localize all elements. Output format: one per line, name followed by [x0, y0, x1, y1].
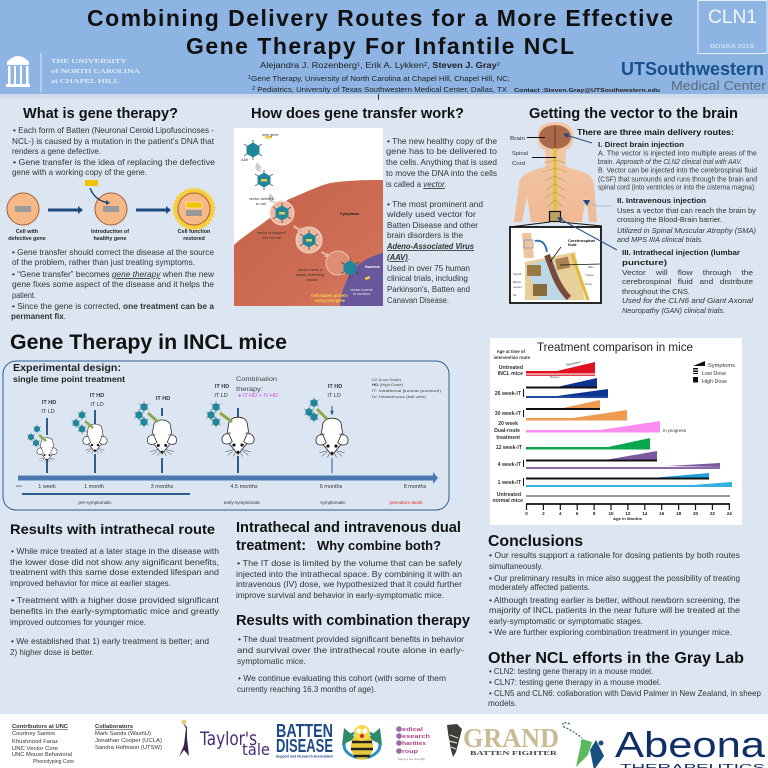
20 week dual route bar: In progress: [663, 428, 686, 433]
figure: vector entering the cell: Nucleus: [365, 265, 380, 269]
figure: vector entering the cell: vector inserts: [350, 288, 373, 292]
cell with defective gene: defective gene: [8, 236, 46, 242]
text: vector explanation: Used in over 75 human: [387, 263, 470, 273]
cell with restored function: [174, 189, 214, 242]
dose labels: IT HD: [156, 396, 170, 402]
timeline labels: birth: [16, 484, 22, 488]
route II: intravenous injection: [617, 196, 757, 244]
row labels: 12 week-IT: [496, 445, 523, 451]
figure: vector entering the cell: using new gene: [315, 298, 346, 303]
text: vector explanation: (AAV).: [387, 252, 410, 262]
text: gene therapy intro: • Gene transfer is the idea of replacing the defective: [13, 157, 215, 167]
figure: vector entering the cell: vector delivers: [249, 197, 274, 201]
row labels: 1 week-IT: [498, 480, 522, 486]
mouse and injection 6 months: [304, 398, 348, 458]
authors and affiliations: Gene Therapy, University of North Carolina at Chapel Hill, Chapel Hill, NC;: [251, 76, 510, 83]
section: results with intrathecal route: 2) higher dose is better.: [10, 647, 94, 657]
authors and affiliations: 2: [252, 86, 255, 92]
combination therapy label: Combination: [236, 376, 277, 383]
text: gene transfer explanation: patient.: [12, 290, 36, 300]
dose labels: IT HD: [90, 393, 104, 399]
row labels: 20 week: [498, 421, 518, 427]
dose labels: IT LD: [41, 409, 55, 415]
cell with restored function: restored: [183, 236, 205, 242]
combination therapy label: therapy:: [236, 386, 263, 393]
30 week bars: [526, 400, 627, 420]
timeline labels: 8 months: [404, 484, 427, 490]
figure: vector entering the cell: new gene: [262, 133, 278, 137]
figure: vector entering the cell: in nucleus: [353, 292, 370, 296]
experimental design heading: Experimental design:: [13, 363, 121, 374]
x axis: Age in Months: [613, 517, 642, 521]
inset: lumbar puncture anatomy: Skin: [588, 265, 594, 269]
section: other NCL efforts: models.: [488, 698, 517, 708]
untreated INCL bars: Rescue: [550, 375, 560, 379]
label: Spinal Cord: Cord: [512, 161, 525, 167]
section: results with combination therapy: Results with combination therapy: [236, 612, 471, 629]
timeline arrow: [18, 472, 438, 484]
authors and affiliations: [248, 61, 661, 94]
inset: lumbar puncture anatomy: Blood: [513, 280, 521, 284]
figure: vector entering the cell: into cell via: [262, 236, 282, 240]
logo: Batten Disease: BATTEN: [276, 721, 333, 741]
figure: human body with spinal cord: [510, 122, 602, 227]
dose legend: [372, 377, 442, 399]
text: vector explanation: clinical trials, including: [387, 273, 468, 283]
timeline labels: [16, 484, 427, 490]
text: vector explanation: [386, 136, 497, 305]
logo: Taylor's Tale: tale: [242, 740, 270, 759]
x axis: 24: [727, 511, 732, 516]
authors and affiliations: 1: [357, 62, 360, 68]
row labels: 30 week-IT: [495, 411, 522, 417]
collaborators: Jonathan Cooper (UCLA): [95, 738, 162, 744]
route I: direct brain injection: [598, 140, 757, 192]
section: conclusions: • We are further exploring combination treatment in younger mice.: [489, 627, 732, 637]
route III: intrathecal injection: III. Intrathecal injection (lumbar: [622, 248, 740, 257]
contributors: Contributors at UNC: [12, 724, 68, 730]
route II: intravenous injection: II. Intravenous injection: [617, 196, 706, 205]
logo: Batten Disease: [276, 721, 333, 758]
figure: vector entering the cell: vesicle: [306, 278, 318, 282]
disease stage labels: premature death: [389, 500, 423, 505]
authors and affiliations: 1: [248, 75, 251, 81]
text: gene transfer explanation: of the problem, rather than just treating symptoms.: [12, 257, 195, 267]
heading: Getting the vector to the brain: Getting the vector to the brain: [529, 106, 738, 122]
text: vector explanation: Parkinson's, Batten and: [387, 284, 470, 294]
section: why combine both: Why combine both?: [317, 538, 441, 553]
cell with healthy gene introduced: healthy gene: [94, 236, 126, 242]
logo: Medical Research Charities Group: esearch: [402, 734, 430, 740]
logo: Medical Research Charities Group: being a our strength: [398, 757, 425, 761]
route I: direct brain injection: (CSF) that surrounds and runs through the brain and: [598, 176, 757, 184]
collaborators: Mark Sands (WashU): [95, 731, 151, 737]
section: results with intrathecal route: [10, 521, 220, 657]
x axis: 10: [608, 511, 614, 516]
timeline labels: 4.5 months: [230, 484, 258, 490]
authors and affiliations: Steven J. Gray: [432, 61, 497, 70]
section: conclusions: Conclusions: [488, 533, 583, 550]
text: vector explanation: to move the DNA into the cells: [386, 168, 497, 178]
timepoint markers: [47, 406, 334, 473]
arrow: [136, 206, 171, 214]
text: vector explanation: Batten Disease and other: [387, 220, 478, 230]
logo: UT Southwestern Medical Center: Medical Center: [671, 79, 766, 93]
text: gene transfer explanation: • Gene transfer should correct the disease at the source: [12, 247, 214, 257]
disease stage labels: early-symptomatic: [224, 500, 261, 505]
contributors: Phenotyping Core: [33, 759, 74, 765]
section: results with combination therapy: [236, 612, 471, 694]
section: why combine both: treatment:: [236, 538, 306, 554]
x axis: 2: [542, 511, 545, 516]
section: other NCL efforts: • CLN7: testing gene therapy in a mouse model.: [489, 677, 661, 687]
contributors: Courtney Santos: [12, 731, 55, 737]
text: gene therapy intro: NCL-) is caused by a mutation in the patient's DNA that: [12, 136, 215, 146]
section: results with combination therapy: symptomatic mice.: [237, 656, 306, 666]
text: gene therapy intro: • Each form of Batten (Neuronal Ceroid Lipofuscinoses -: [13, 125, 214, 135]
combination therapy label: ● IT HD + IV HD: [238, 393, 278, 399]
untreated INCL bars: [526, 360, 595, 379]
logo: Medical Research Charities Group: harities: [402, 741, 426, 747]
20 week dual route bar: [526, 421, 686, 433]
text: delivery routes: There are three main delivery routes:: [577, 127, 734, 137]
row labels: INCL mice: [498, 371, 523, 377]
row labels: 26 week-IT: [495, 391, 522, 397]
section: other NCL efforts: Other NCL efforts in the Gray Lab: [488, 650, 744, 667]
logo: University of North Carolina: at CHAPEL HILL: [51, 78, 119, 85]
logo: Batten Disease: DISEASE: [276, 736, 333, 756]
section: conclusions: simultaneously.: [489, 561, 543, 571]
heading: Gene Therapy in INCL mice: Gene Therapy in INCL mice: [10, 331, 287, 354]
text: gene transfer explanation: [11, 247, 215, 321]
mouse and injection 4.5 months: [206, 402, 254, 457]
dose labels: IT HD: [42, 400, 56, 406]
row labels: Dual-route: [494, 428, 520, 434]
cell with healthy gene introduced: [85, 180, 129, 242]
route III: intrathecal injection: Neuropathy (GAN) clinical trials.: [622, 306, 725, 315]
cell with defective gene: Cell with: [16, 229, 38, 235]
heading: What is gene therapy: What is gene therapy?: [23, 106, 178, 122]
x axis: 18: [676, 511, 682, 516]
logo: bee mascot: [342, 725, 382, 760]
figure: vector entering the cell: AAV: [241, 158, 249, 162]
label: Spinal Cord: Spinal: [512, 151, 528, 157]
route III: intrathecal injection: Vector will flow through the: [622, 268, 753, 277]
cell with healthy gene introduced: Introduction of: [91, 229, 129, 235]
text: vector explanation: gene has to be delivered to: [386, 146, 497, 156]
section: conclusions: moderately affected patients.: [489, 582, 590, 592]
route I: direct brain injection: B. Vector can be injected into the cerebrospinal fluid: [598, 168, 757, 174]
timeline labels: 3 months: [151, 484, 174, 490]
logo: Batten Disease: Support and Research Association: [276, 754, 333, 758]
authors and affiliations: Alejandra J. Rozenberg: [260, 61, 344, 70]
logo: University of North Carolina: [6, 53, 140, 92]
text: gene transfer explanation: • Since the gene is corrected, one treatment can be a: [12, 301, 214, 311]
inset: lumbar puncture anatomy: Cerebrospinal: [568, 238, 595, 243]
dose legend: IT: Intrathecal (lumbar puncture): [372, 388, 442, 393]
row labels: Untreated: [499, 365, 523, 371]
x axis: 6: [576, 511, 579, 516]
label: Spinal Cord: [512, 151, 556, 167]
section: other NCL efforts: • CLN2: testing gene therapy in a mouse model.: [489, 666, 653, 676]
route I: direct brain injection: A. The vector is injected into multiple areas of the: [598, 150, 757, 158]
row labels: intervention route: [493, 355, 531, 360]
logo: Medical Research Charities Group: roup: [402, 749, 419, 755]
text: gene therapy intro: gene with a working copy of the gene.: [12, 167, 147, 177]
collaborators: Sandra Hofmann (UTSW): [95, 745, 162, 751]
logo: University of North Carolina: THE UNIVERSITY: [51, 58, 127, 65]
dose labels: IT LD: [90, 402, 104, 408]
section: conclusions: [488, 533, 740, 637]
mouse and injection 1 month: [72, 410, 107, 454]
section: results with intrathecal route: benefits in the early-symptomatic mice and greatly: [10, 606, 220, 616]
title: Gene Therapy For Infantile NCL: [186, 33, 574, 59]
section: results with intrathecal route: • Treatment with a higher dose provided significant: [11, 595, 220, 605]
cell with restored function: Cell function: [178, 229, 210, 235]
section: conclusions: early-symptomatic or symptomatic stages.: [489, 616, 643, 626]
header banner: [0, 0, 768, 100]
authors and affiliations: ,: [427, 61, 432, 70]
section: other NCL efforts: [488, 650, 761, 708]
section: results with intrathecal route: treatment with this same dose extended lifespan and: [10, 567, 219, 577]
logo: UT Southwestern Medical Center: [621, 59, 766, 93]
collaborators: [95, 724, 162, 751]
text: vector explanation: Canavan Disease.: [387, 295, 449, 305]
logo: Abeona Therapeutics: [563, 723, 766, 768]
heading: How does gene transfer work: How does gene transfer work?: [251, 106, 464, 122]
route II: intravenous injection: Uses a vector that can reach the brain by: [617, 206, 756, 215]
diagram: gene replacement in cells: [7, 180, 214, 242]
route III: intrathecal injection: cerebrospinal fluid and distribute: [622, 277, 753, 286]
label: Brain: Brain: [510, 136, 525, 142]
text: vector explanation: • The new healthy copy of the: [387, 136, 497, 146]
disease stage labels: pre-symptomatic: [78, 500, 112, 505]
inset: lumbar puncture anatomy: vessel: [513, 285, 522, 289]
section: results with intrathecal route: • We established that 1) early treatment is better; and: [11, 636, 209, 646]
row labels: 4 week-IT: [498, 462, 522, 468]
route II: intravenous injection: and MPS IIIA clinical trials.: [617, 235, 703, 244]
badge: CLN1: [698, 0, 767, 54]
title: Combining Delivery Routes for a More Effective: [87, 5, 673, 31]
logo: Medical Research Charities Group: [396, 726, 430, 761]
untreated INCL bars: Symptoms: [565, 360, 581, 367]
disease stage labels: symptomatic: [320, 500, 346, 505]
section: conclusions: • Our results support a rationale for dosing patients by both routes: [489, 550, 740, 560]
x axis: 0: [525, 511, 528, 516]
dose labels: IT LD: [327, 393, 341, 399]
dose labels: IT HD: [328, 384, 342, 390]
route I: direct brain injection: spinal cord (into ventricles or into the cisterna magna).: [598, 184, 756, 192]
section: results with combination therapy: currently reaching 16.3 months of age).: [237, 684, 376, 694]
route II: intravenous injection: crossing the Blood-Brain barrier.: [617, 215, 722, 224]
dose legend: IV: Intravenous (tail vein): [372, 394, 427, 399]
text: gene transfer explanation: permanent fix.: [11, 311, 66, 321]
section: why combine both: injected into the intrathecal space. By combining it with an: [236, 569, 462, 579]
dose labels: [41, 384, 342, 415]
row labels: Age at time of: [497, 349, 526, 354]
figure: vector entering the cell: to cell: [256, 202, 266, 206]
logo: Grand Batten Fighter: BATTEN FIGHTER: [470, 751, 558, 757]
chart: treatment comparison in mice: Treatment comparison in mice: [537, 342, 693, 354]
contributors: Khushnood Faraz: [12, 739, 58, 745]
text: gene transfer explanation: gene fixes some aspect of the disease and it helps the: [12, 279, 214, 289]
figure: vector entering the cell: [234, 128, 383, 306]
1 week bars: [526, 473, 732, 487]
section: why combine both: [236, 520, 463, 600]
figure: vector entering the cell: vector forms a: [298, 268, 323, 272]
chart: treatment comparison in mice: [490, 338, 742, 525]
experimental design heading: [13, 363, 125, 384]
row labels: treatment: [496, 435, 520, 441]
normal mice bar: [526, 495, 730, 497]
inset: lumbar puncture anatomy: Dura: [585, 282, 592, 286]
text: vector explanation: • The most prominent and: [387, 199, 483, 209]
section: results with combination therapy: • The dual treatment provided significant benefits in behavior: [238, 634, 464, 644]
route III: intrathecal injection: Used for the CLN6 and Giant Axonal: [622, 296, 753, 305]
authors and affiliations: 2: [497, 62, 500, 68]
inset: lumbar puncture anatomy: [510, 227, 601, 303]
timeline labels: 1 week: [38, 484, 56, 490]
figure: vector entering the cell: transit-defending: [296, 273, 324, 277]
text: gene therapy intro: [12, 125, 215, 177]
logo: Abeona Therapeutics: Abeona: [615, 724, 766, 765]
figure: vector entering the cell: vector is shipped: [257, 231, 286, 235]
section: why combine both: improve survival and behavior in early-symptomatic mice.: [236, 590, 444, 600]
cell with defective gene: [7, 193, 46, 242]
contributors: [12, 724, 74, 765]
contributors: UNC Mouse Behavioral: [12, 752, 72, 758]
text: vector explanation: brain disorders is the: [387, 230, 463, 240]
figure: vector entering the cell: cell makes protein: [311, 293, 348, 298]
inset: lumbar puncture anatomy: Tissue: [585, 273, 594, 277]
experimental design heading: single time point treatment: [13, 375, 125, 384]
section: other NCL efforts: • CLN5 and CLN6: collaboration with David Palmer in New Zealand, in sheep: [489, 688, 761, 698]
row labels: [492, 349, 531, 504]
timeline labels: 6 months: [320, 484, 343, 490]
timeline labels: 1 month: [84, 484, 104, 490]
logo: Medical Research Charities Group: edical: [402, 727, 424, 733]
26 week bars: [526, 378, 608, 398]
contributors: UNC Vector Core: [12, 746, 58, 752]
route III: intrathecal injection: puncture): [622, 258, 668, 267]
logo: Taylor's Tale: [179, 720, 270, 759]
chart legend: Low Dose: [702, 371, 726, 377]
figure: vector entering the cell: Cytoplasm: [340, 212, 360, 216]
x axis: 22: [710, 511, 715, 516]
route III: intrathecal injection: [622, 248, 753, 315]
section: results with intrathecal route: the lower dose did not show any significant benefits,: [10, 557, 219, 567]
4 week bars: [526, 451, 720, 469]
mouse and injection 3 months: [134, 402, 177, 456]
row labels: Untreated: [497, 492, 521, 498]
text: vector explanation: Adeno-Associated Virus: [386, 241, 474, 251]
section: conclusions: • Although treating earlier is better, without newborn screening, the: [489, 595, 740, 605]
section: results with intrathecal route: • While mice treated at a later stage in the disease with: [11, 546, 219, 556]
authors and affiliations: Contact :Steven.Gray@UTSouthwestern.edu: [514, 88, 661, 94]
inset: lumbar puncture anatomy: fluid: [568, 242, 577, 247]
badge: CLN1: BDSRA 2018: [710, 44, 754, 50]
12 week bar: [526, 438, 650, 450]
mouse and injection 1 week: [27, 424, 57, 462]
section: why combine both: Intrathecal and intravenous dual: [236, 520, 461, 536]
authors and affiliations: 2: [424, 62, 427, 68]
section: conclusions: • Our preliminary results in mice also suggest the possibility of treating: [489, 573, 740, 583]
text: vector explanation: is called a vector.: [386, 179, 447, 189]
section: results with intrathecal route: improved behavior for mice at earlier stages.: [10, 578, 171, 588]
x axis: 14: [642, 511, 648, 516]
route I: direct brain injection: brain. Approach of the CLN2 clinical trial with AAV.: [598, 159, 742, 166]
dose legend: HD (High Dose): [372, 382, 404, 387]
logo: Taylor's Tale: Taylor's: [199, 728, 257, 750]
dose labels: IT HD: [215, 384, 229, 390]
logo: University of North Carolina: of NORTH CAROLINA: [51, 68, 140, 75]
text: gene therapy intro: renders a gene defective.: [12, 146, 101, 156]
x axis: 20: [693, 511, 698, 516]
section: results with intrathecal route: Results with intrathecal route: [10, 521, 215, 537]
route II: intravenous injection: Utilized in Spinal Muscular Atrophy (SMA): [617, 226, 757, 235]
chart legend: High Dose: [702, 379, 727, 385]
x axis: 8: [593, 511, 596, 516]
row labels: normal mice: [492, 498, 523, 504]
dose legend: LD (Low Dose): [372, 377, 402, 382]
logo: UT Southwestern Medical Center: UTSouthwestern: [621, 59, 764, 79]
text: gene transfer explanation: • “Gene transfer” becomes gene therapy when the new: [12, 269, 215, 279]
logo: Grand Batten Fighter: GRAND: [463, 723, 559, 753]
badge: CLN1: CLN1: [708, 7, 757, 28]
authors and affiliations: , Erik A. Lykken: [360, 61, 424, 70]
combination therapy label: [236, 376, 278, 399]
text: vector explanation: widely used vector for: [386, 209, 476, 219]
arrows: delivery route pointers: [557, 133, 617, 250]
panel: experimental design timeline: [3, 361, 449, 510]
section: why combine both: • The IT dose is limited by the volume that can be safely: [237, 558, 463, 568]
dose labels: IT LD: [214, 393, 228, 399]
section: results with intrathecal route: improved outcomes for younger mice.: [10, 617, 146, 627]
inset: lumbar puncture anatomy: Spinal: [513, 272, 522, 276]
inset: lumbar puncture anatomy: fat: [513, 293, 517, 297]
x axis: [525, 504, 732, 521]
section: results with combination therapy: and survival over the intrathecal route alone in early-: [237, 645, 464, 655]
chart legend: Symptoms: [708, 363, 735, 369]
section: why combine both: intravenous (IV) dose, we hypothesized that it could further: [236, 579, 462, 589]
text: delivery routes: [577, 127, 757, 315]
x axis: 12: [625, 511, 631, 516]
route III: intrathecal injection: throughout the CNS.: [622, 287, 690, 296]
collaborators: Collaborators: [95, 724, 133, 730]
section: results with combination therapy: • We continue evaluating this cohort (with some of them: [238, 673, 446, 683]
chart legend: [693, 361, 735, 385]
route I: direct brain injection: I. Direct brain injection: [598, 140, 684, 149]
row brackets: [522, 389, 524, 486]
title: [87, 5, 673, 59]
section: conclusions: majority of INCL patients in the near future will be treated at the: [489, 605, 740, 615]
arrow: [48, 206, 83, 214]
x axis: 4: [559, 511, 562, 516]
authors and affiliations: Pediatrics, University of Texas Southwestern Medical Center, Dallas, TX: [255, 87, 507, 94]
text: vector explanation: the cells. Anything that is used: [386, 157, 497, 167]
x axis: 16: [659, 511, 665, 516]
disease stage labels: [22, 493, 423, 505]
